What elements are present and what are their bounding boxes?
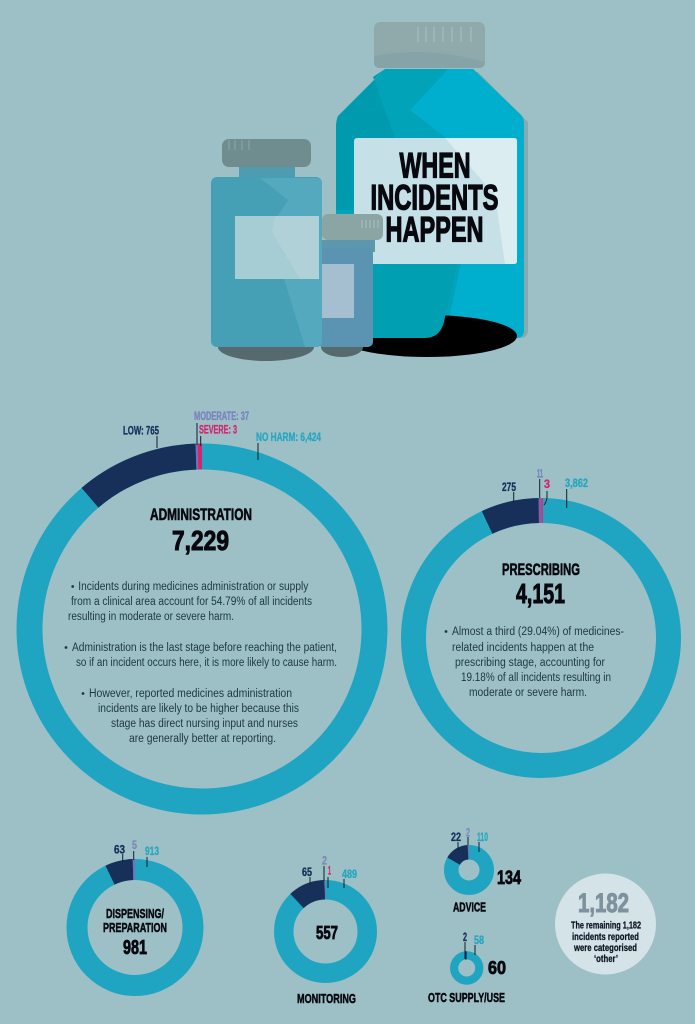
callout: other incidents: incidents reported: [572, 932, 639, 943]
panel: advice donut: [451, 826, 521, 914]
callout: other incidents: The remaining 1,182: [571, 920, 641, 932]
panel: prescribing donut: [414, 466, 668, 766]
heading: advice: ADVICE: [453, 900, 486, 914]
text block: administration notes: stage has direct nursing input and nurses: [111, 718, 298, 730]
harm labels: NO HARM: 6,424: [256, 430, 321, 444]
title: INCIDENTS: [370, 178, 498, 218]
icon: medium bottle: [211, 139, 322, 361]
chart: dispensing ring: [77, 869, 193, 986]
harm labels: [114, 838, 159, 867]
heading: administration: ADMINISTRATION: [150, 505, 252, 524]
harm labels: 2: [322, 854, 327, 868]
callout: other incidents: 1,182: [578, 888, 629, 918]
text block: administration notes: so if an incident occurs here, it is more likely to cause harm.: [76, 657, 337, 669]
heading: dispensing: 981: [123, 937, 147, 959]
harm labels: 3,862: [565, 476, 588, 490]
harm labels: 110: [477, 830, 488, 844]
chart: administration ring: [30, 456, 374, 802]
harm labels: 58: [474, 933, 484, 947]
text block: prescribing notes: related incidents happen at the: [452, 642, 594, 654]
text block: prescribing notes: moderate or severe harm.: [469, 687, 587, 699]
chart: monitoring ring: [284, 890, 367, 973]
heading: dispensing: DISPENSING/: [106, 906, 164, 921]
callout: other incidents: ‘other’: [594, 954, 618, 965]
text block: prescribing notes: Almost a third (29.04%) of medicines-: [452, 626, 624, 638]
harm labels: [123, 409, 321, 460]
harm labels: 5: [132, 838, 137, 852]
harm labels: 2: [466, 826, 470, 840]
harm labels: LOW: 765: [123, 424, 159, 438]
harm labels: MODERATE: 37: [194, 409, 249, 423]
text block: administration notes: [65, 581, 337, 745]
heading: prescribing: [502, 560, 580, 609]
label with title: [354, 138, 517, 264]
text block: prescribing notes: [445, 626, 624, 699]
illustration: medicine bottles with title: [211, 22, 528, 361]
chart: prescribing ring: [414, 510, 668, 766]
title: WHEN: [400, 146, 470, 186]
text block: administration notes: Administration is the last stage before reaching the patient,: [72, 642, 337, 654]
icon: large bottle: [336, 22, 528, 357]
heading: monitoring: MONITORING: [297, 991, 356, 1006]
text block: administration notes: However, reported medicines administration: [89, 688, 292, 700]
panel: dispensing donut: [77, 838, 193, 986]
harm labels: [451, 826, 488, 852]
heading: OTC: OTC SUPPLY/USE: [428, 990, 505, 1005]
harm labels: 1: [328, 864, 331, 878]
chart: OTC ring: [454, 955, 479, 981]
panel: OTC supply donut: [428, 930, 506, 1005]
text block: prescribing notes: 19.18% of all incidents resulting in: [461, 672, 611, 684]
icon: small bottle: [318, 214, 383, 357]
harm labels: 2: [463, 930, 467, 944]
text block: administration notes: incidents are likely to be higher because this: [98, 703, 299, 715]
title: [370, 146, 498, 250]
heading: prescribing: 4,151: [516, 578, 565, 609]
callout: other incidents: [555, 874, 656, 974]
harm labels: 65: [302, 865, 312, 879]
heading: administration: 7,229: [172, 525, 229, 556]
harm labels: 22: [451, 830, 461, 844]
harm labels: [463, 930, 484, 959]
text block: administration notes: Incidents during medicines administration or supply: [78, 581, 309, 593]
panel: administration donut: [30, 409, 374, 802]
text block: administration notes: are generally better at reporting.: [129, 733, 276, 745]
harm labels: SEVERE: 3: [199, 422, 237, 436]
total: monitoring: 557: [316, 923, 338, 943]
heading: dispensing: PREPARATION: [103, 920, 167, 935]
harm labels: [302, 854, 357, 888]
text block: prescribing notes: prescribing stage, accounting for: [455, 657, 605, 669]
panel: monitoring donut: [284, 854, 367, 1006]
heading: administration: [150, 505, 252, 556]
harm labels: 3: [544, 477, 550, 491]
heading: prescribing: PRESCRIBING: [502, 560, 580, 579]
text block: administration notes: resulting in moderate or severe harm.: [68, 611, 234, 623]
harm labels: [502, 466, 588, 508]
harm labels: 489: [342, 867, 357, 881]
callout: other incidents: were categorised: [573, 943, 637, 954]
total: OTC: 60: [488, 958, 506, 978]
heading: dispensing: [103, 906, 167, 959]
harm labels: 913: [145, 844, 159, 858]
title: HAPPEN: [386, 210, 484, 250]
total: advice: 134: [497, 868, 521, 889]
harm labels: 11: [537, 466, 543, 480]
harm labels: 63: [114, 842, 125, 856]
text block: administration notes: from a clinical area account for 54.79% of all incidents: [71, 596, 312, 608]
chart: advice ring: [451, 852, 487, 888]
harm labels: 275: [502, 480, 516, 494]
